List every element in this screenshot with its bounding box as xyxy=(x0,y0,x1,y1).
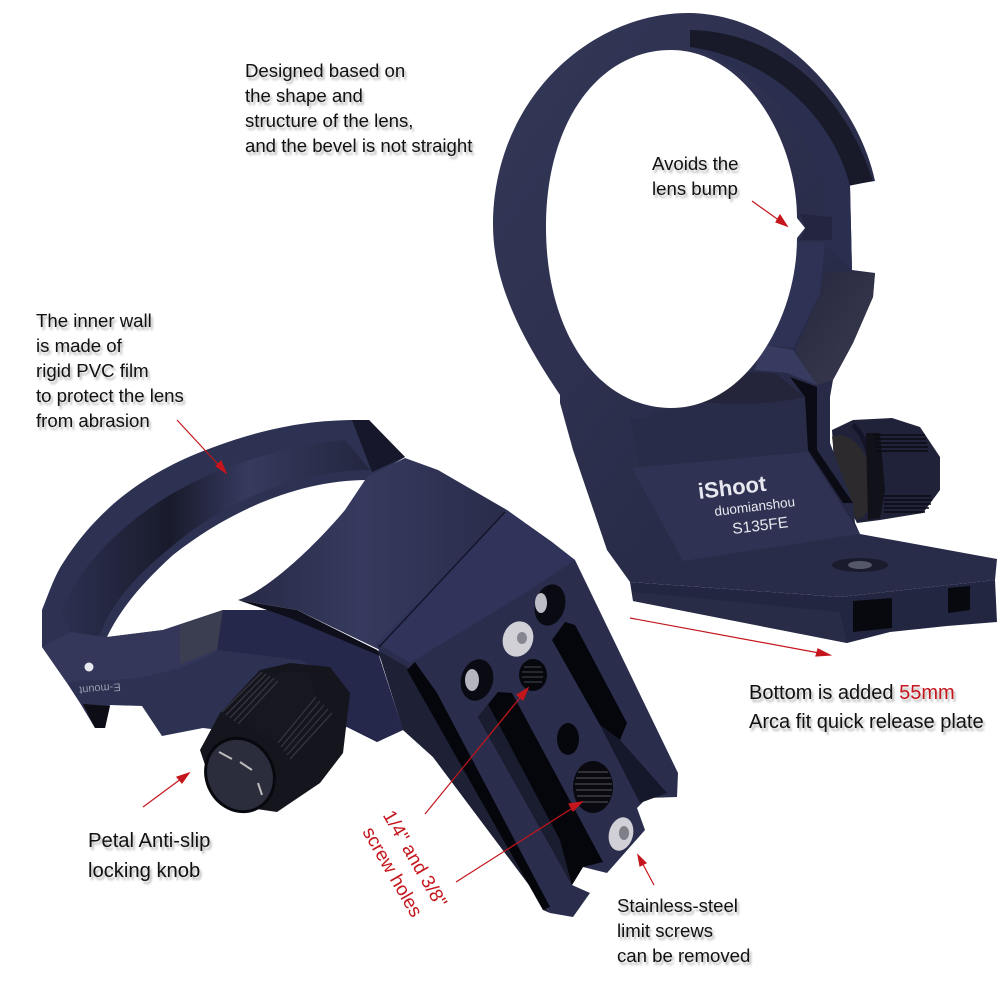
lower arm block xyxy=(795,272,875,385)
callout: lens bump xyxy=(652,153,740,203)
arrow: three-eighths hole xyxy=(456,802,582,882)
left ring xyxy=(42,420,405,742)
logo text: iShoot xyxy=(697,471,768,504)
callout: quick release plate xyxy=(749,682,986,736)
hub lower arm xyxy=(217,610,403,742)
callout: locking knob xyxy=(88,830,213,885)
rail channel xyxy=(407,662,550,910)
callout: inner wall: from abrasion xyxy=(36,410,150,431)
knob xyxy=(191,663,350,826)
callout: inner wall: rigid PVC film xyxy=(36,360,149,381)
callout: lens bump: Avoids the xyxy=(652,153,738,174)
inner wall xyxy=(62,440,370,638)
callout: inner wall xyxy=(36,310,186,431)
right slot xyxy=(552,622,627,740)
bottom wedge xyxy=(630,372,815,466)
callout: inner wall: The inner wall xyxy=(36,310,152,331)
screws and holes xyxy=(530,581,570,629)
right knob xyxy=(832,418,940,523)
left collar xyxy=(42,420,678,917)
right collar xyxy=(493,13,997,643)
callout: quick release plate: Bottom is added 55mm xyxy=(749,682,955,704)
quick release plate xyxy=(377,510,678,917)
callout: bevel design: structure of the lens, xyxy=(245,110,413,131)
callout: inner wall: to protect the lens xyxy=(36,385,184,406)
callout: limit screws: can be removed xyxy=(617,945,750,966)
mount text: E-mount xyxy=(79,680,121,696)
arrow: inner wall xyxy=(177,420,226,473)
callout: locking knob: locking knob xyxy=(88,860,200,882)
tab dot xyxy=(84,662,94,672)
side strip xyxy=(377,650,550,913)
callout: limit screws xyxy=(617,895,752,966)
arrow: limit screws xyxy=(638,855,654,885)
lens opening xyxy=(546,50,805,408)
callout: inner wall: is made of xyxy=(36,335,122,356)
right ring and body xyxy=(493,13,875,561)
logo text xyxy=(697,471,796,538)
callout: locking knob: Petal Anti-slip xyxy=(88,830,210,852)
band under ring xyxy=(42,610,223,683)
callout: screw holes: screw holes xyxy=(358,824,426,921)
callout: screw holes: 1/4" and 3/8" xyxy=(378,807,451,912)
left slot xyxy=(478,692,603,885)
callout: bevel design: Designed based on xyxy=(245,60,405,81)
logo text: S135FE xyxy=(731,514,789,538)
inner arm face xyxy=(765,242,825,348)
callout: limit screws: limit screws xyxy=(617,920,713,941)
red arrows xyxy=(143,201,830,885)
callout: bevel design: and the bevel is not straight xyxy=(245,135,472,156)
arrow: knob xyxy=(143,773,189,807)
logo text: duomianshou xyxy=(714,494,796,519)
ring top end xyxy=(352,420,405,472)
callout: quick release plate: Arca fit quick release plate xyxy=(749,711,984,733)
callout: bevel design xyxy=(245,60,475,160)
logo panel xyxy=(632,452,860,561)
arrow: quarter inch hole xyxy=(425,688,528,814)
callout: limit screws: Stainless-steel xyxy=(617,895,738,916)
inner rim xyxy=(690,47,852,270)
arrow: quick release plate xyxy=(630,618,830,656)
dark upper crescent xyxy=(690,30,873,186)
callout: lens bump: lens bump xyxy=(652,178,738,199)
right plate with dovetail xyxy=(607,534,997,643)
arrow: lens bump xyxy=(752,201,787,226)
callout: bevel design: the shape and xyxy=(245,85,363,106)
central hub xyxy=(238,458,507,650)
split line xyxy=(790,377,853,503)
